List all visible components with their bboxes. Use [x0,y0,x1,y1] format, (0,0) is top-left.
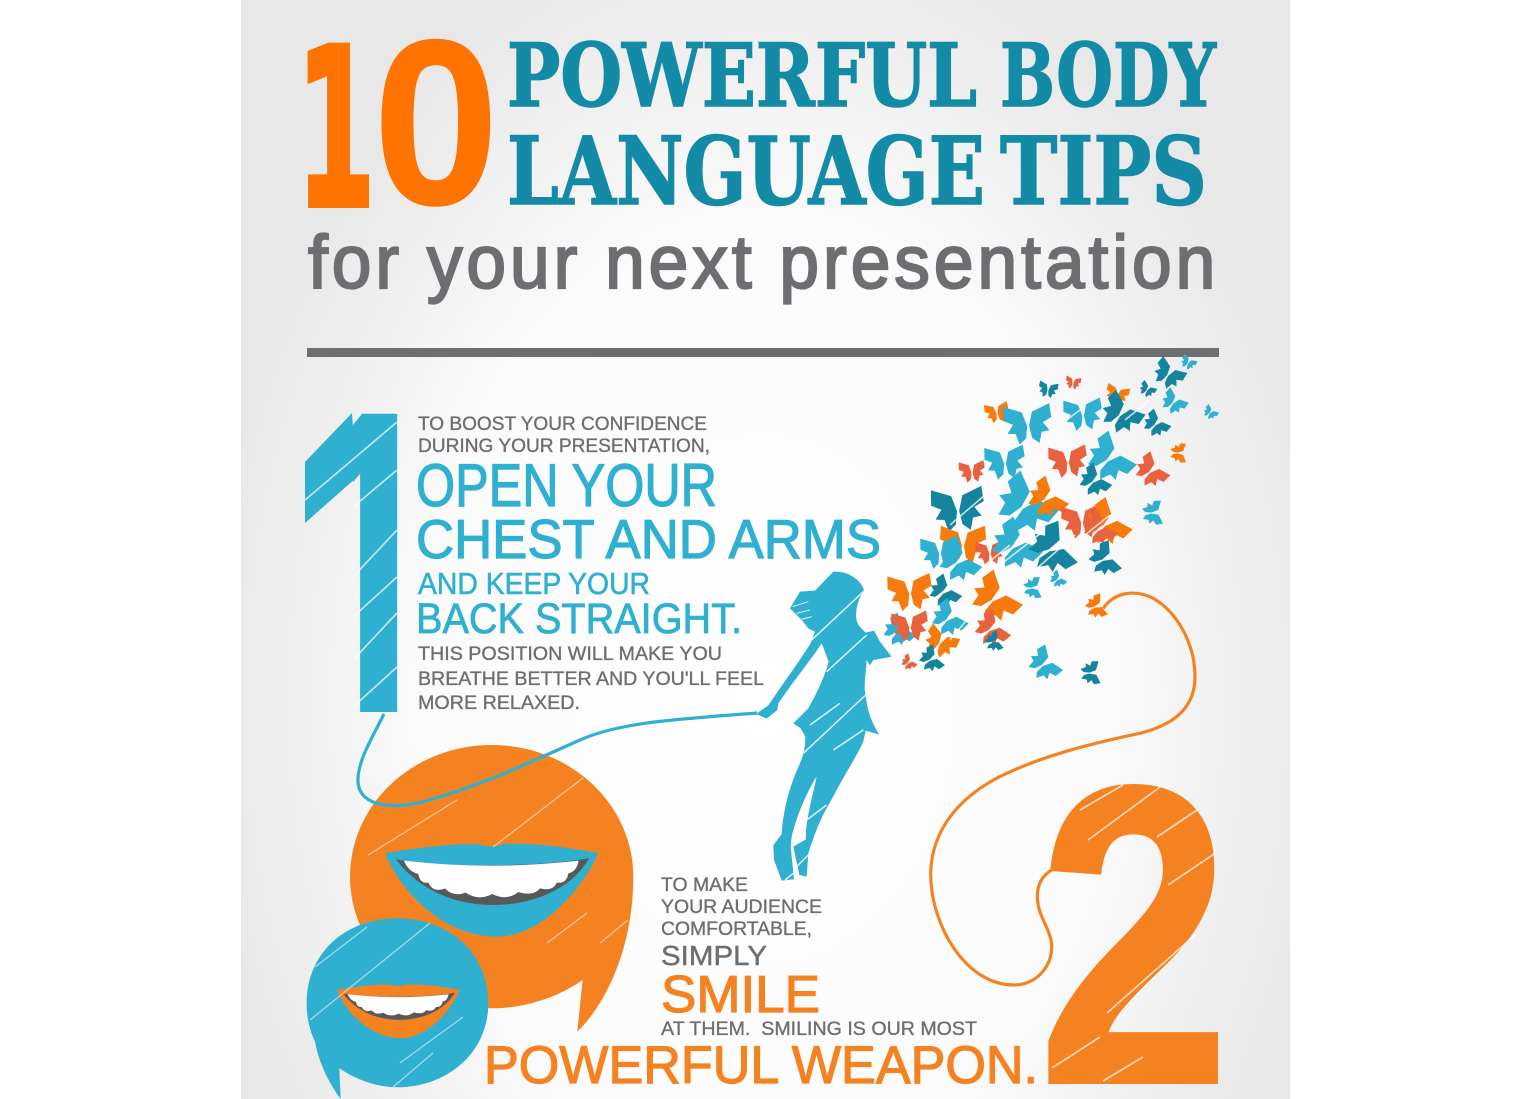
title line 2: TIPS [1000,117,1207,227]
tip 1 intro [418,413,710,457]
tip 2 body: AT THEM. SMILING IS OUR MOST [661,1018,977,1040]
tip 1 body [418,643,764,714]
tip 1 text [416,413,881,714]
tip 1 intro: DURING YOUR PRESENTATION, [418,435,710,457]
large smile [385,844,598,937]
tip 1 body: BREATHE BETTER AND YOU'LL FEEL [418,668,764,690]
title line 1: POWERFUL [507,24,977,127]
tip 1 headline: BACK STRAIGHT. [416,595,742,643]
page background panel [241,0,1290,1099]
subtitle: for your next presentation [308,221,1215,304]
butterflies [878,354,1219,686]
title line 2: LANGUAGE [507,117,985,227]
number hatch highlights [305,422,1217,1081]
tip 2 intro: COMFORTABLE, [661,918,812,940]
blue connector line from 1 to girl [358,713,757,806]
tip 1 headline: AND KEEP YOUR [418,566,650,601]
orange speech bubble [350,745,633,1032]
simply: SIMPLY [661,940,767,971]
divider [307,348,1219,357]
tip 1 headline: CHEST AND ARMS [416,508,881,570]
speech bubbles with smiles [307,745,633,1099]
orange connector line from 2 to butterfly [931,593,1195,985]
smile headline: SMILE [661,966,820,1024]
powerful weapon headline: POWERFUL WEAPON. [484,1036,1038,1095]
tip 2 intro: YOUR AUDIENCE [661,896,822,918]
title number 10: 1 [296,2,376,258]
tip 1 number: 1 [297,303,447,878]
tip 2 intro [661,874,822,940]
tip 1 body: MORE RELAXED. [418,692,580,714]
small smile [337,984,460,1038]
tip 2 text [484,874,1038,1095]
tip 1 intro: TO BOOST YOUR CONFIDENCE [418,413,707,435]
tip 2 intro: TO MAKE [661,874,748,896]
title line 1: BODY [1000,24,1217,127]
girl silhouette [756,572,892,881]
blue speech bubble [307,918,488,1099]
tip 1 body: THIS POSITION WILL MAKE YOU [418,643,722,665]
title number 10 [296,0,499,258]
title [296,0,1217,304]
tip 1 headline [416,452,881,643]
tip 1 number [305,413,398,712]
tip 1 headline: OPEN YOUR [416,452,717,519]
